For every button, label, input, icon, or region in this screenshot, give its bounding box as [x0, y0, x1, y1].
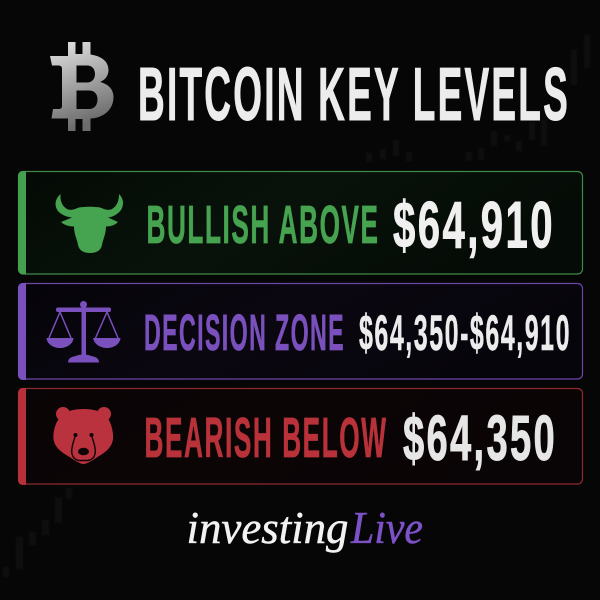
panel: bearish: [18, 388, 582, 485]
logo: investingLive: investing: [186, 503, 348, 553]
panel: bullish: [18, 171, 582, 274]
icon: bitcoin symbol: [50, 42, 114, 131]
panel: decision zone: [18, 283, 582, 380]
icon: bear head: [53, 407, 113, 464]
panel: decision zone: DECISION ZONE: [144, 304, 345, 361]
logo: investingLive: [186, 503, 423, 553]
decorative candlesticks: top right: [366, 35, 590, 162]
decorative candlesticks: bottom left: [3, 488, 72, 577]
logo: investingLive: Live: [350, 503, 423, 553]
icon: balance scales: [46, 301, 120, 362]
icon: bull head: [56, 194, 123, 253]
